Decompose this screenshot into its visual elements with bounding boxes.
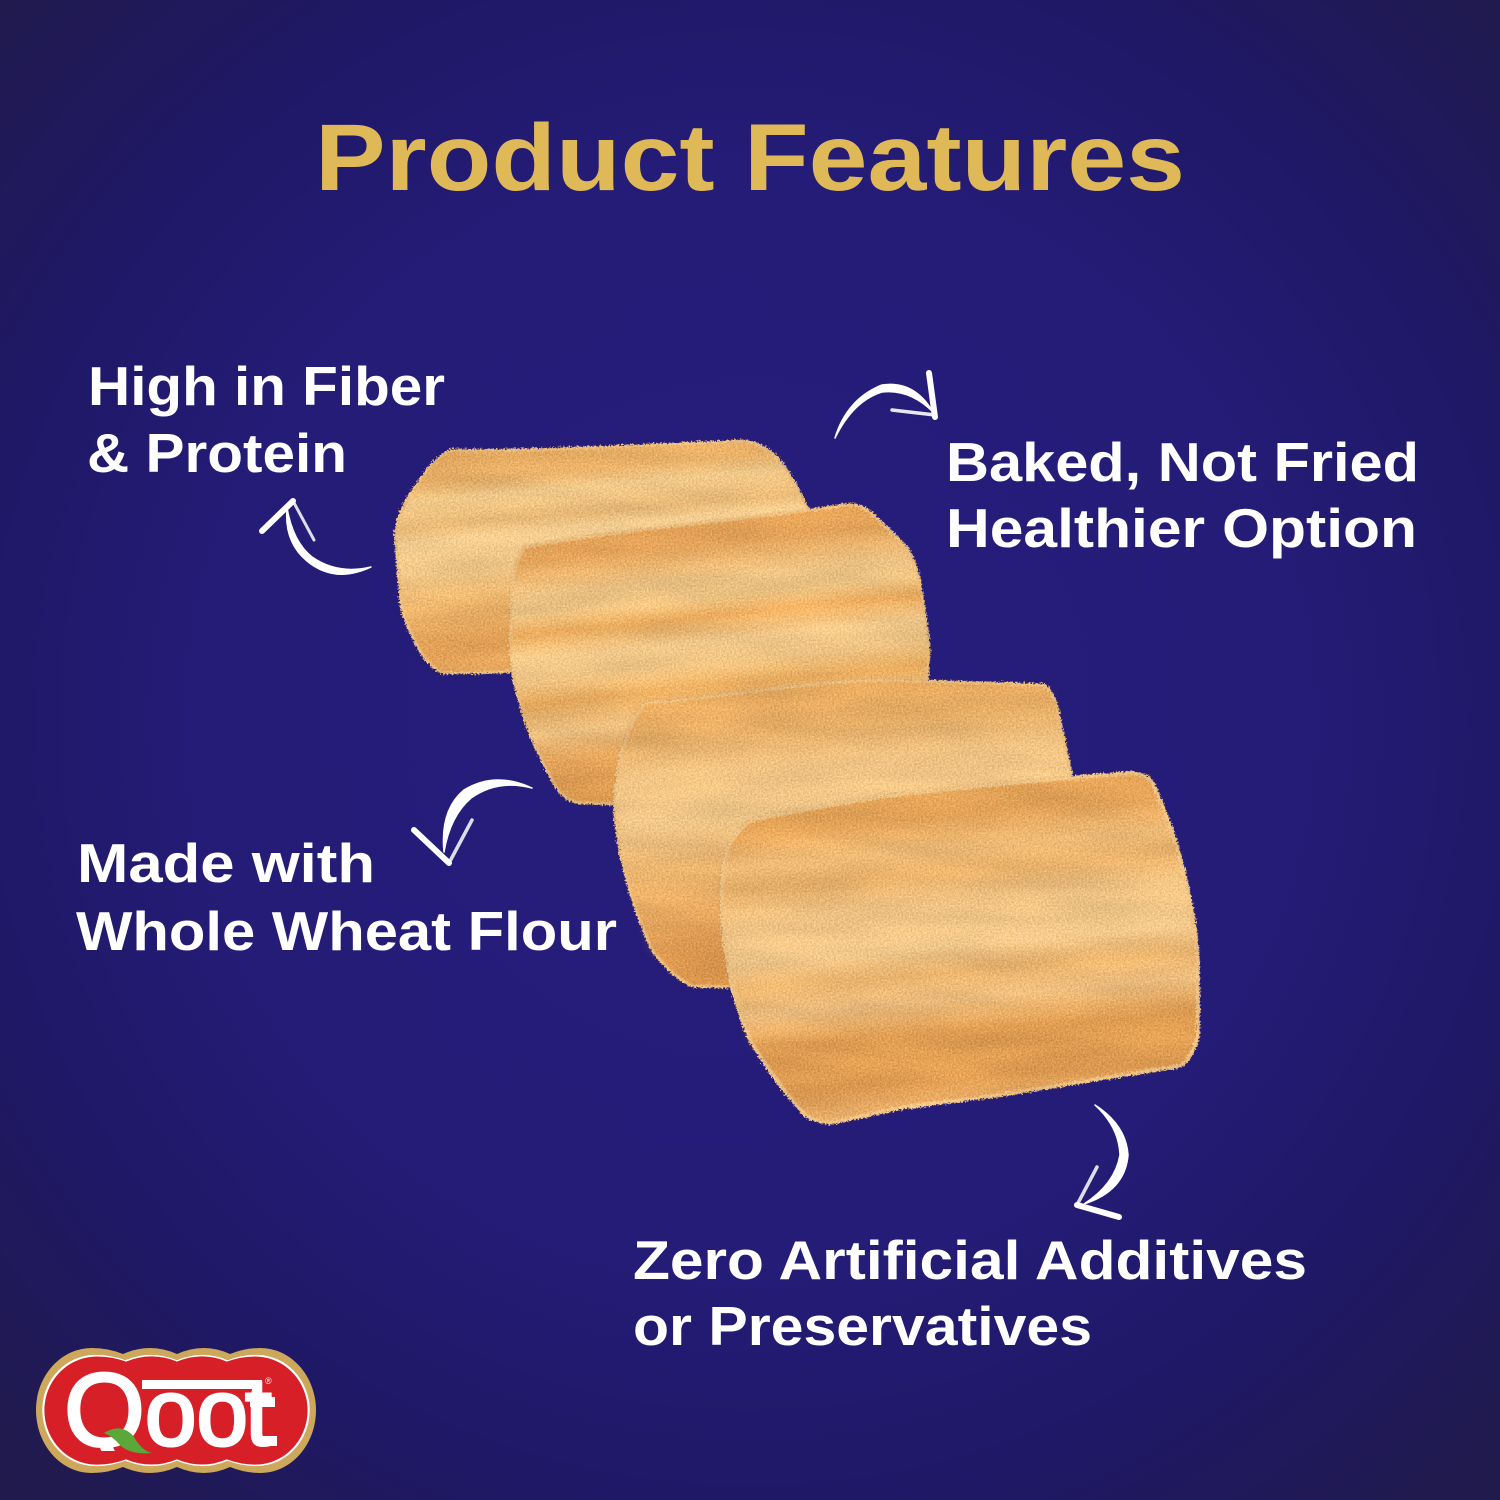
heading: high in fiber: & Protein [87, 422, 347, 484]
logo wordmark: oo [145, 1360, 248, 1466]
cookie 1 [395, 441, 810, 673]
logo: Qoot [36, 1348, 316, 1473]
logo red field [44, 1356, 308, 1465]
heading: made with whole wheat flour: Whole Wheat Flour [76, 900, 617, 962]
heading: made with whole wheat flour [76, 832, 617, 962]
logo wordmark [67, 1372, 277, 1451]
arrow: to High in Fiber [262, 501, 371, 574]
heading: high in fiber [87, 355, 445, 484]
logo gold border [36, 1348, 316, 1473]
title: Product Features [315, 105, 1185, 211]
logo white line [42, 1355, 310, 1466]
logo wordmark: Q [64, 1353, 145, 1469]
heading: baked not fried: Healthier Option [946, 497, 1417, 559]
logo leaf [104, 1428, 152, 1453]
heading: zero artificial additives: or Preservatives [633, 1295, 1092, 1357]
cookie 2 shadow [618, 684, 1065, 985]
cookie 1 shadow [512, 510, 925, 800]
heading: made with whole wheat flour: Made with [77, 832, 375, 894]
logo wordmark: t [245, 1359, 272, 1466]
heading: zero artificial additives: Zero Artificial Additives [633, 1229, 1307, 1291]
arrow: to Made with [414, 780, 532, 863]
arrow: to Baked, Not Fried [835, 373, 935, 438]
arrow: to Zero Artificial Additives [1077, 1105, 1128, 1217]
logo registered mark: ® [265, 1376, 272, 1386]
cookie 3 shadow [722, 778, 1190, 1118]
cookie 2 [511, 505, 929, 805]
cookie 4 [722, 773, 1198, 1123]
heading: high in fiber: High in Fiber [88, 355, 445, 417]
heading: baked not fried: Baked, Not Fried [946, 431, 1419, 493]
heading: baked not fried [946, 431, 1419, 559]
heading: zero artificial additives [633, 1229, 1307, 1357]
cookie stack [395, 441, 1198, 1123]
cookie 3 [615, 680, 1075, 987]
